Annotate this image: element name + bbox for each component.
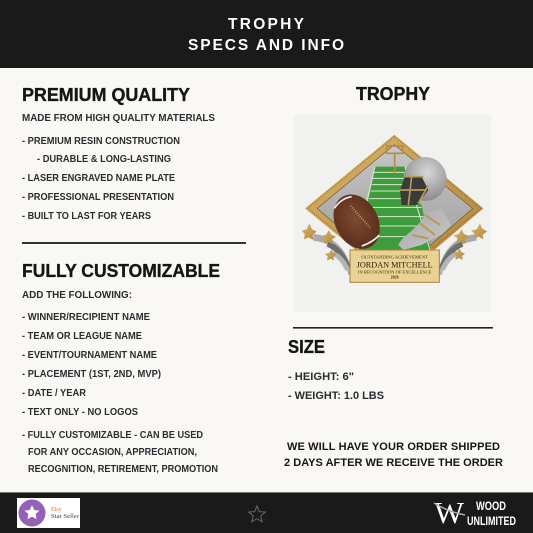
wood unlimited logo: UNLIMITED — [467, 514, 516, 528]
etsy star seller badge: Etsy — [51, 507, 62, 513]
trophy photo — [294, 115, 491, 312]
star bursts — [313, 234, 353, 275]
footer — [0, 492, 533, 533]
name plate: JORDAN MITCHELL — [357, 261, 433, 270]
panel: fully customizable — [22, 261, 220, 475]
wood unlimited logo: WOOD — [476, 499, 506, 513]
customization list: RECOGNITION, RETIREMENT, PROMOTION — [28, 464, 218, 475]
header title: SPECS AND INFO — [188, 37, 344, 54]
customization list: - TEXT ONLY - NO LOGOS — [22, 407, 138, 418]
customization list: - TEAM OR LEAGUE NAME — [22, 331, 142, 342]
header title — [188, 16, 344, 54]
customization list: - EVENT/TOURNAMENT NAME — [22, 350, 157, 361]
customization list: - WINNER/RECIPIENT NAME — [22, 312, 150, 323]
icon: star — [248, 506, 266, 522]
helmet — [403, 157, 447, 201]
customization list: ADD THE FOLLOWING: — [22, 290, 132, 301]
shipping note: WE WILL HAVE YOUR ORDER SHIPPED — [287, 441, 500, 453]
size specs: - HEIGHT: 6" — [288, 371, 354, 383]
heading: fully customizable: FULLY CUSTOMIZABLE — [22, 261, 220, 281]
customization list: FOR ANY OCCASION, APPRECIATION, — [28, 447, 197, 458]
field — [358, 167, 431, 250]
panel: premium quality — [22, 85, 215, 222]
heading: trophy: TROPHY — [356, 84, 430, 104]
customization list: - PLACEMENT (1ST, 2ND, MVP) — [22, 369, 161, 380]
wood unlimited logo — [434, 495, 516, 530]
customization list: - FULLY CUSTOMIZABLE - CAN BE USED — [22, 430, 203, 441]
quality feature list: - BUILT TO LAST FOR YEARS — [22, 211, 151, 222]
wood unlimited logo: W — [434, 495, 465, 530]
size specs — [288, 371, 384, 402]
diamond frame — [305, 135, 483, 249]
quality feature list — [22, 113, 215, 222]
panel: size — [288, 337, 384, 402]
name plate: 2026 — [391, 275, 399, 280]
shipping note: 2 DAYS AFTER WE RECEIVE THE ORDER — [284, 457, 503, 469]
customization list — [22, 290, 218, 475]
heading: premium quality: PREMIUM QUALITY — [22, 85, 190, 105]
etsy star seller badge: Star Seller — [51, 514, 79, 520]
quality feature list: MADE FROM HIGH QUALITY MATERIALS — [22, 113, 215, 124]
name plate — [350, 250, 439, 282]
shipping note — [284, 441, 503, 469]
header — [0, 0, 533, 68]
quality feature list: - PREMIUM RESIN CONSTRUCTION — [22, 136, 180, 147]
size specs: - WEIGHT: 1.0 LBS — [288, 390, 384, 402]
etsy star seller badge — [17, 498, 80, 528]
quality feature list: - PROFESSIONAL PRESENTATION — [22, 192, 174, 203]
shoe — [398, 208, 451, 250]
customization list: - DATE / YEAR — [22, 388, 87, 399]
header title: TROPHY — [228, 16, 305, 33]
football — [324, 186, 389, 257]
quality feature list: - DURABLE & LONG-LASTING — [37, 154, 171, 165]
goal post — [387, 146, 403, 173]
name plate: IN RECOGNITION OF EXCELLENCE — [358, 269, 432, 274]
name plate: OUTSTANDING ACHIEVEMENT — [361, 255, 428, 260]
quality feature list: - LASER ENGRAVED NAME PLATE — [22, 173, 175, 184]
heading: size: SIZE — [288, 337, 325, 357]
